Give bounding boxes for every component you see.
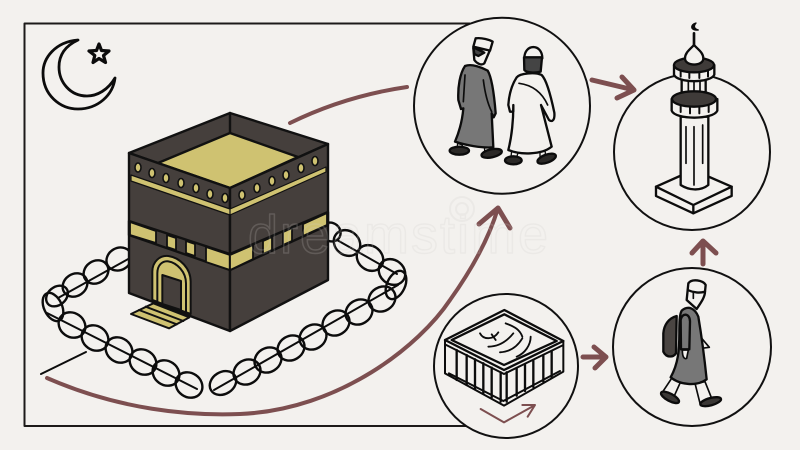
arm — [702, 338, 709, 348]
roof and inner parapet — [129, 113, 328, 188]
minaret top — [672, 23, 717, 118]
gold strips — [131, 167, 326, 215]
Kaaba — [129, 113, 328, 331]
panel: walking pilgrim — [613, 268, 771, 426]
robe — [671, 308, 707, 384]
frame — [24, 24, 470, 426]
door and stairs — [131, 256, 191, 328]
frieze lamps — [135, 156, 318, 202]
panel: two pilgrims — [414, 18, 590, 194]
prayer beads — [39, 219, 410, 403]
arrow: book to walker — [583, 347, 606, 368]
line stub — [41, 352, 86, 374]
icon: crescent and star — [43, 40, 115, 109]
backpack — [663, 316, 677, 357]
pilgrim in white — [505, 47, 557, 166]
head — [687, 290, 705, 309]
book cover — [445, 310, 563, 370]
arrow: long curve — [47, 208, 510, 414]
arrow: people to minaret — [592, 77, 634, 98]
panel: holy book — [434, 294, 578, 438]
book arrow — [481, 405, 535, 422]
pilgrim in grey — [450, 38, 503, 159]
book sides — [445, 340, 563, 406]
calligraphy — [480, 323, 531, 357]
arrow: walker to minaret — [692, 241, 716, 264]
arrow: curved upper — [290, 87, 407, 123]
minaret base and column — [656, 117, 732, 213]
legs — [662, 378, 712, 403]
panel: minaret — [614, 23, 770, 230]
watermark: dreamstime — [248, 205, 548, 265]
gold band — [129, 221, 230, 270]
left wall — [129, 153, 230, 331]
right wall — [230, 144, 328, 331]
